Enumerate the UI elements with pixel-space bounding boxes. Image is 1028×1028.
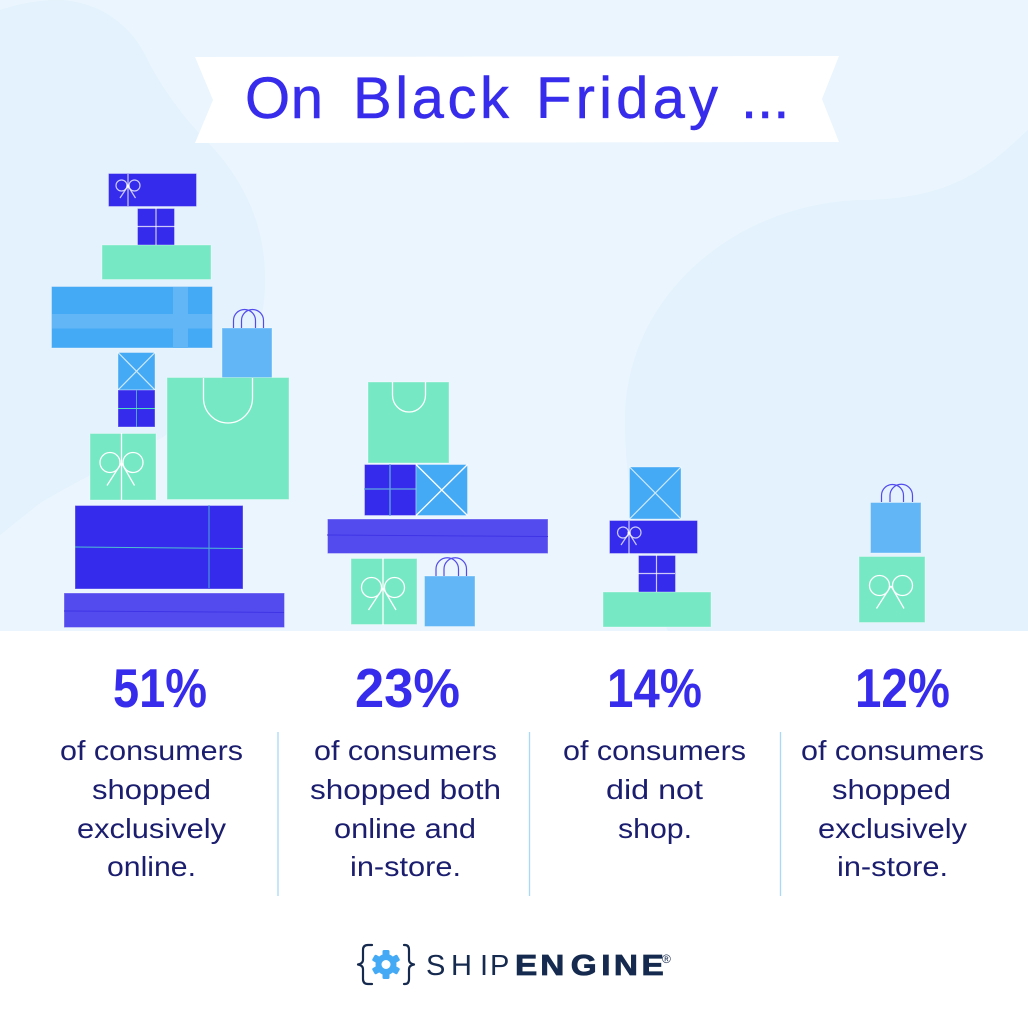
stat: 12%: 12%: [855, 657, 950, 719]
stat: 14%: [563, 657, 746, 844]
stat: 23%: 23%: [355, 657, 460, 719]
stat: 23%: in-store.: [350, 851, 461, 882]
stat: 14%: 14%: [607, 657, 702, 719]
wordmark: ENGINE: [515, 949, 664, 981]
gift: small dark box: [638, 555, 676, 592]
stat: 12%: exclusively: [818, 813, 967, 844]
shopping bag: light blue: [222, 310, 272, 378]
gift: blue box with cross: [416, 464, 468, 516]
icon: gear: [372, 950, 400, 979]
title banner: ...: [741, 66, 789, 131]
shopping bag: light blue: [870, 484, 921, 553]
stat: 51%: exclusively: [77, 813, 226, 844]
wordmark: ®: [662, 952, 671, 966]
shopping bag: light blue: [424, 558, 475, 626]
stat: 23%: online and: [334, 813, 476, 844]
shopping bag: large green: [167, 378, 289, 500]
title banner: [195, 56, 839, 143]
gift: dark box with bow: [610, 520, 698, 554]
shopping bag: green: [368, 382, 449, 463]
stat: 12%: shopped: [832, 774, 951, 805]
gift: green box: [603, 592, 711, 627]
stat: 14%: of consumers: [563, 735, 746, 766]
gift: blue box with cross: [630, 467, 681, 519]
gift: wide blue box with band: [52, 286, 212, 348]
gift: green box: [102, 245, 211, 280]
stat: 51%: shopped: [92, 774, 211, 805]
stack: 14% did not shop: [603, 467, 711, 627]
logo: ShipEngine: [358, 945, 671, 984]
title banner: Black: [353, 66, 510, 131]
stat: 12%: [801, 657, 984, 882]
stat: 51%: of consumers: [60, 735, 243, 766]
gift: green box with bow: [859, 556, 925, 622]
gift: green box with bow: [351, 558, 417, 625]
title banner: On: [245, 66, 323, 131]
gift: green box with bow: [90, 433, 156, 500]
gift: dark box with bow: [108, 174, 196, 206]
gift: large dark box: [75, 505, 243, 589]
gift: small dark box: [118, 390, 155, 427]
stack: 23% both online and in-store: [327, 382, 548, 626]
stat: 12%: in-store.: [837, 851, 948, 882]
stat: 51%: [60, 657, 243, 882]
stat: 51%: 51%: [113, 657, 207, 719]
stat: 14%: did not: [606, 774, 703, 805]
icon: braces: [358, 945, 414, 984]
stat: 23%: [310, 657, 501, 882]
gift: flat purple box: [64, 593, 284, 628]
stat: 23%: of consumers: [314, 735, 497, 766]
wordmark: SHIP: [426, 950, 509, 982]
stat: 14%: shop.: [618, 813, 692, 844]
stack: 12% exclusively in-store: [859, 484, 925, 622]
gift: small dark box: [137, 208, 175, 246]
gift: blue box with cross: [118, 352, 155, 390]
wordmark: [426, 949, 671, 982]
gift: dark box: [364, 464, 416, 516]
stat: 23%: shopped both: [310, 774, 501, 805]
stat: 12%: of consumers: [801, 735, 984, 766]
stat: 51%: online.: [107, 851, 196, 882]
title banner: Friday: [536, 66, 718, 131]
stack: 51% exclusively online: [52, 174, 289, 628]
gift: flat purple box: [327, 519, 548, 554]
